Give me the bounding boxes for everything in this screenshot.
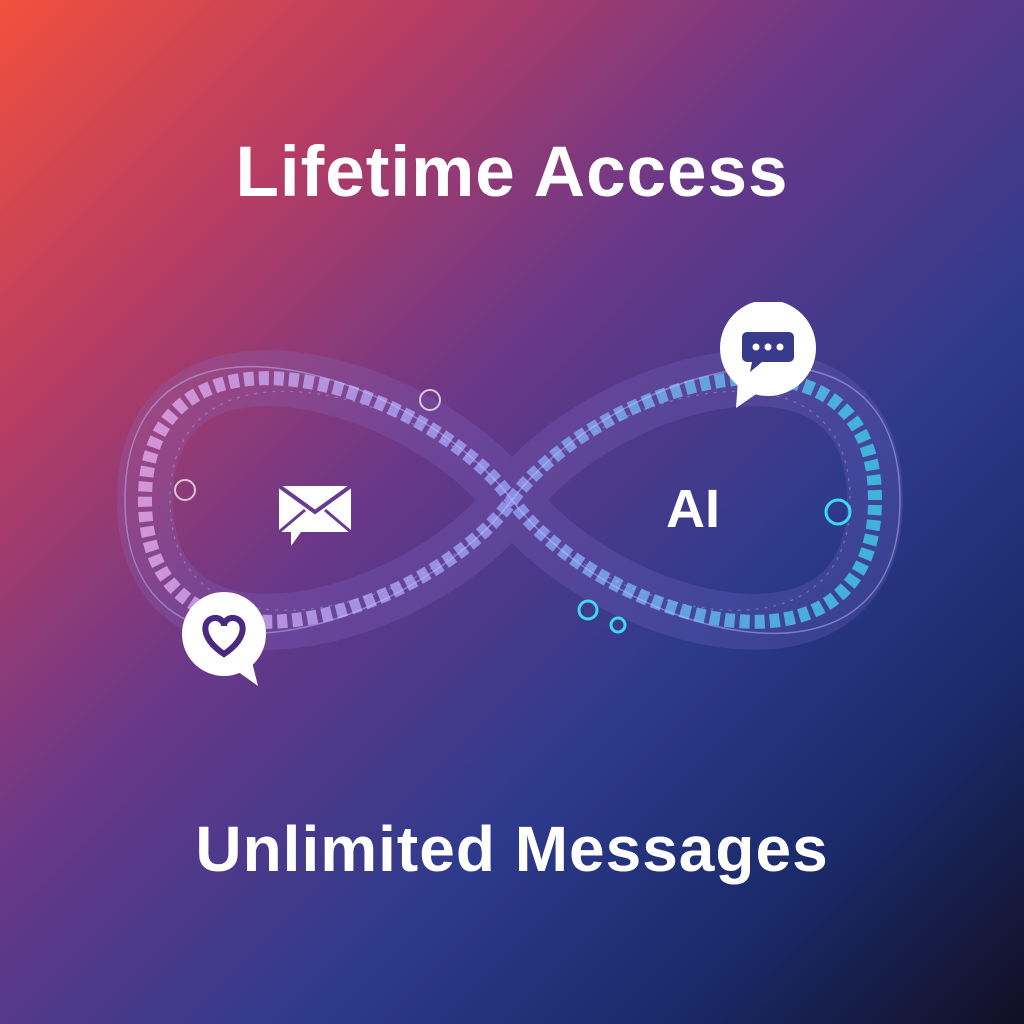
title: Lifetime Access (235, 133, 788, 212)
icon: chat bubble (720, 302, 816, 408)
icon: envelope (278, 484, 352, 546)
icon: heart bubble (182, 592, 266, 686)
AI label: AI (666, 479, 720, 539)
subtitle: Unlimited Messages (195, 813, 829, 885)
